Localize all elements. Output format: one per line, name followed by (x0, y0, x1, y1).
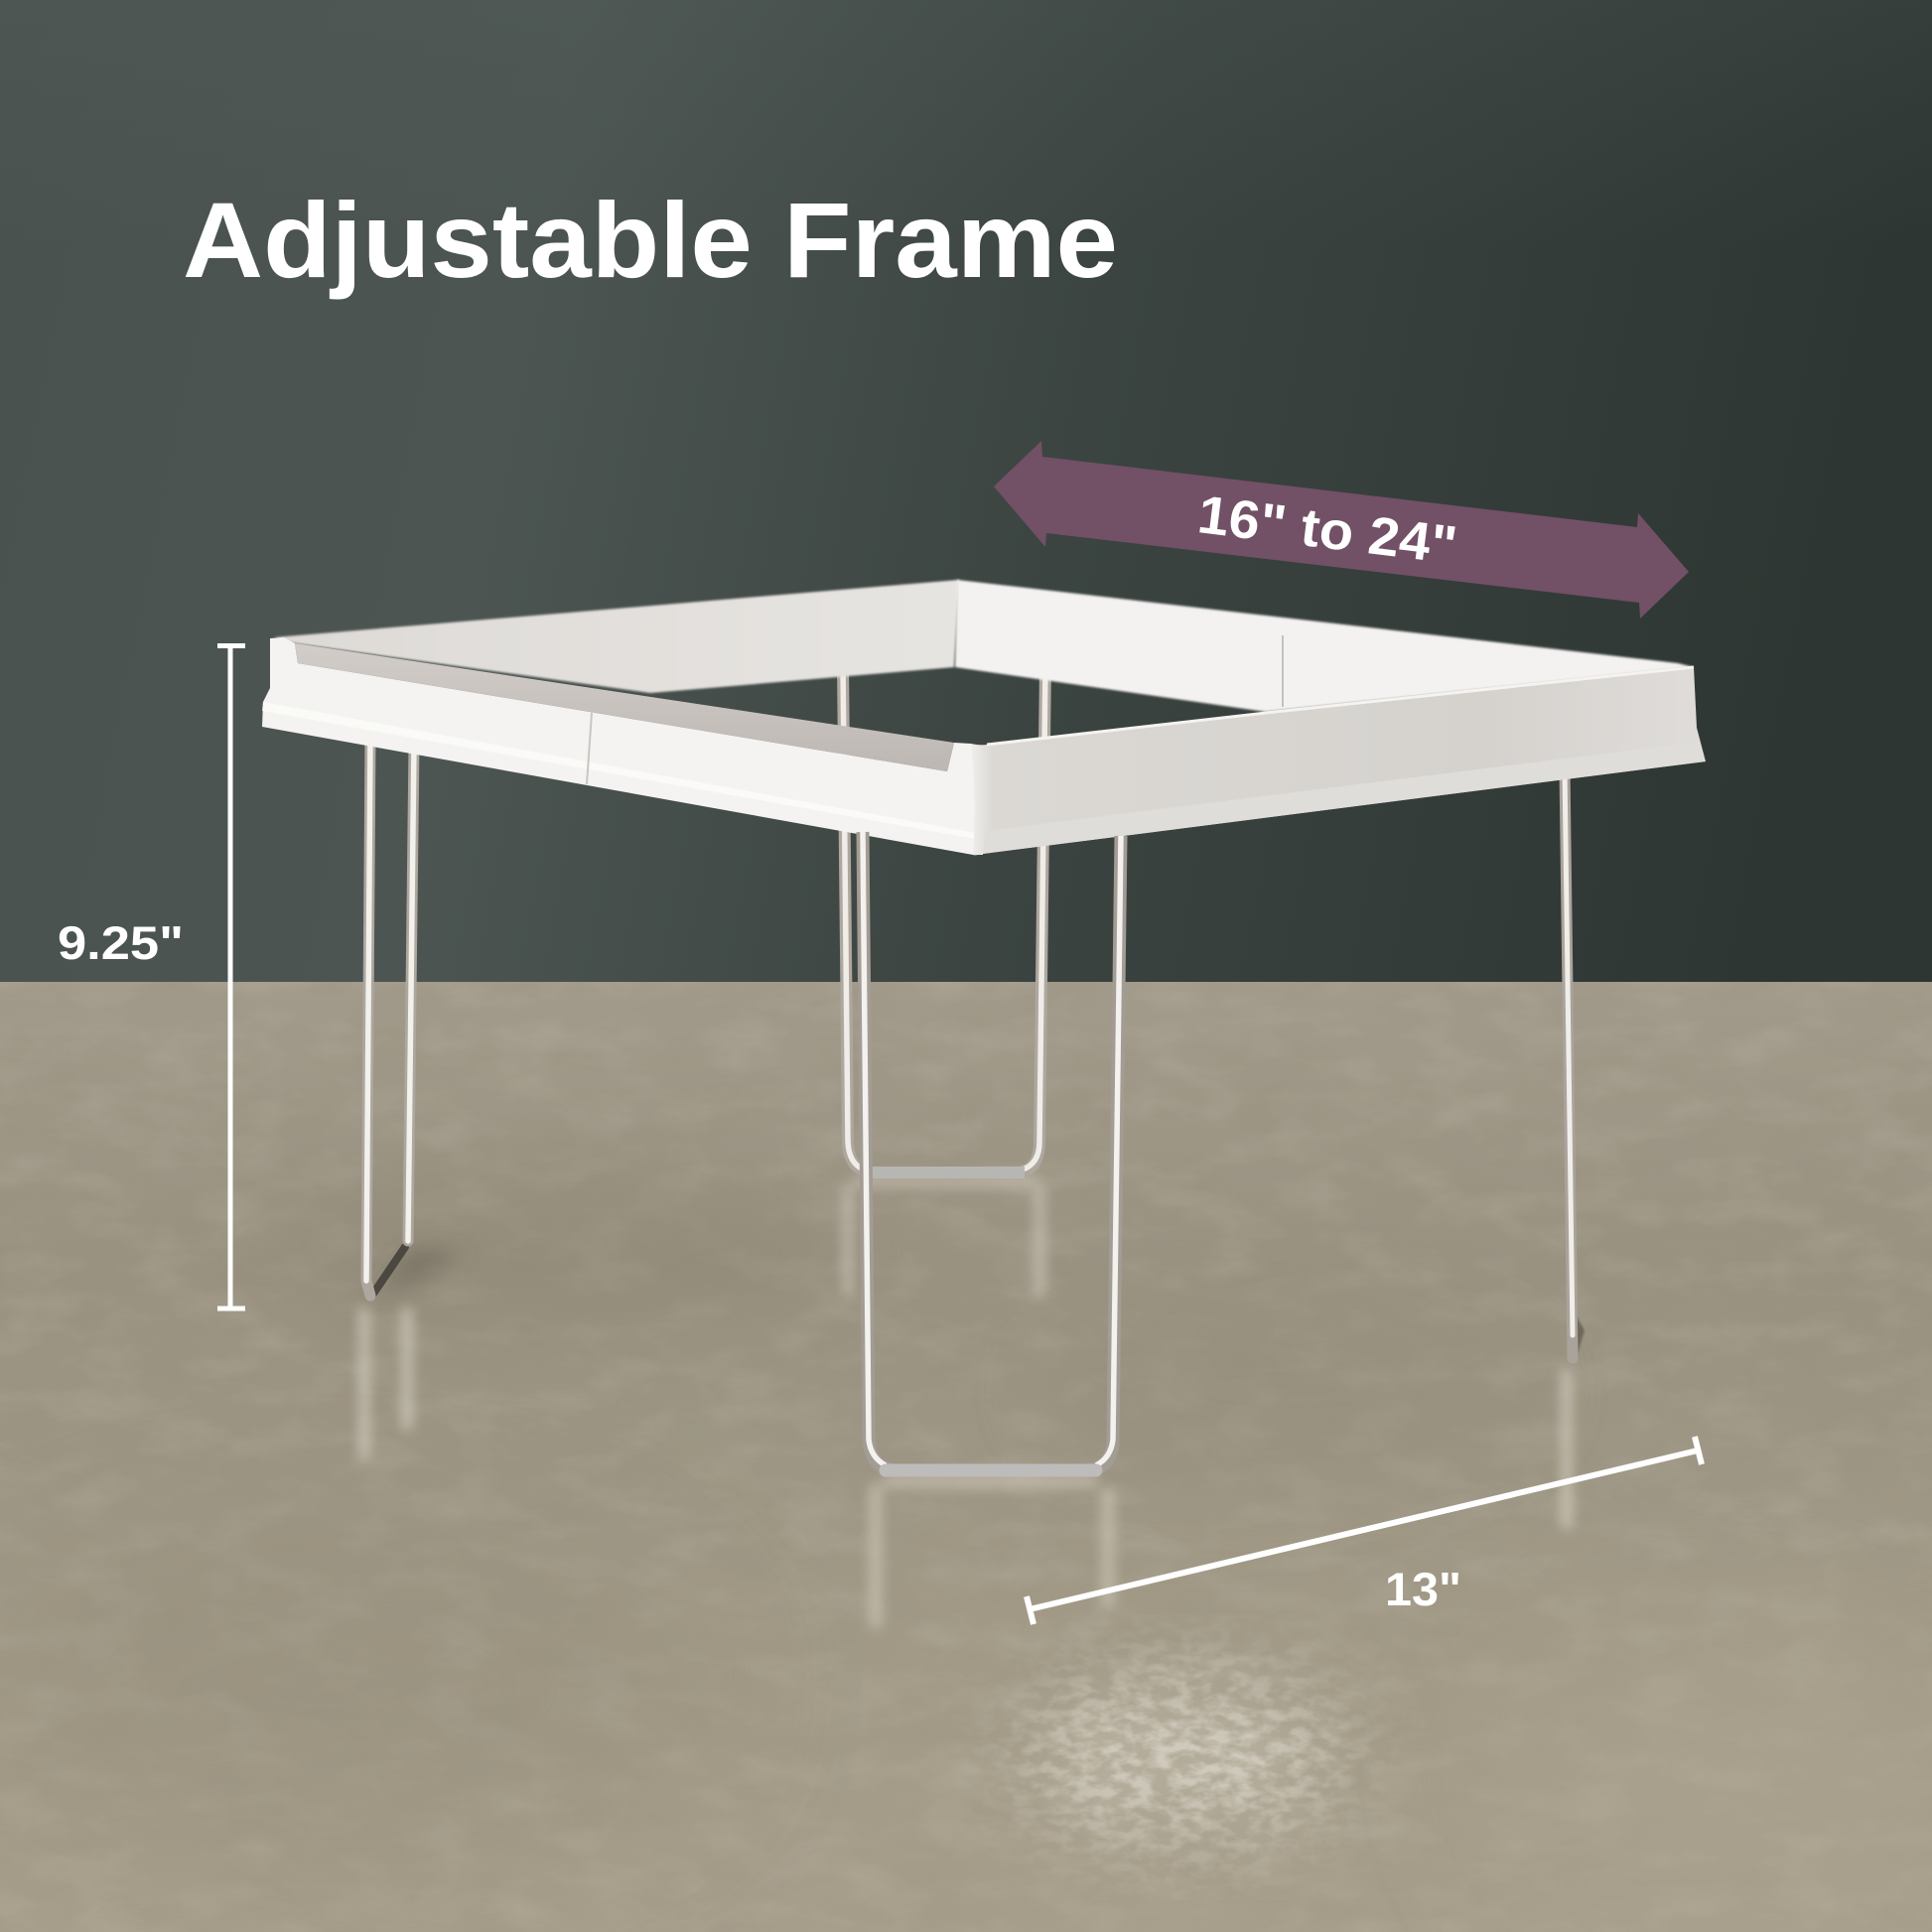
concrete floor (0, 982, 1932, 1932)
depth label: 13" (1385, 1563, 1461, 1615)
depth dimension line (1027, 1437, 1702, 1624)
height dimension line (217, 644, 245, 1310)
adjustable white frame (262, 580, 1706, 855)
front left face (262, 637, 983, 855)
wall background (0, 0, 1932, 983)
right inner wall of frame (955, 580, 1694, 712)
front right face (971, 667, 1706, 855)
width label: 16" to 24" (1194, 484, 1460, 576)
silver sliding rail (295, 643, 954, 771)
back wall of frame (274, 580, 959, 693)
right leg (1565, 769, 1573, 1358)
back leg (843, 665, 1045, 1173)
arrow: width range 16 to 24 inches (994, 441, 1689, 619)
left leg (366, 740, 414, 1296)
title: Adjustable Frame (183, 180, 1118, 300)
floor reflections and shadows (364, 1181, 1585, 1628)
height label: 9.25" (58, 916, 184, 969)
front leg (863, 832, 1121, 1470)
